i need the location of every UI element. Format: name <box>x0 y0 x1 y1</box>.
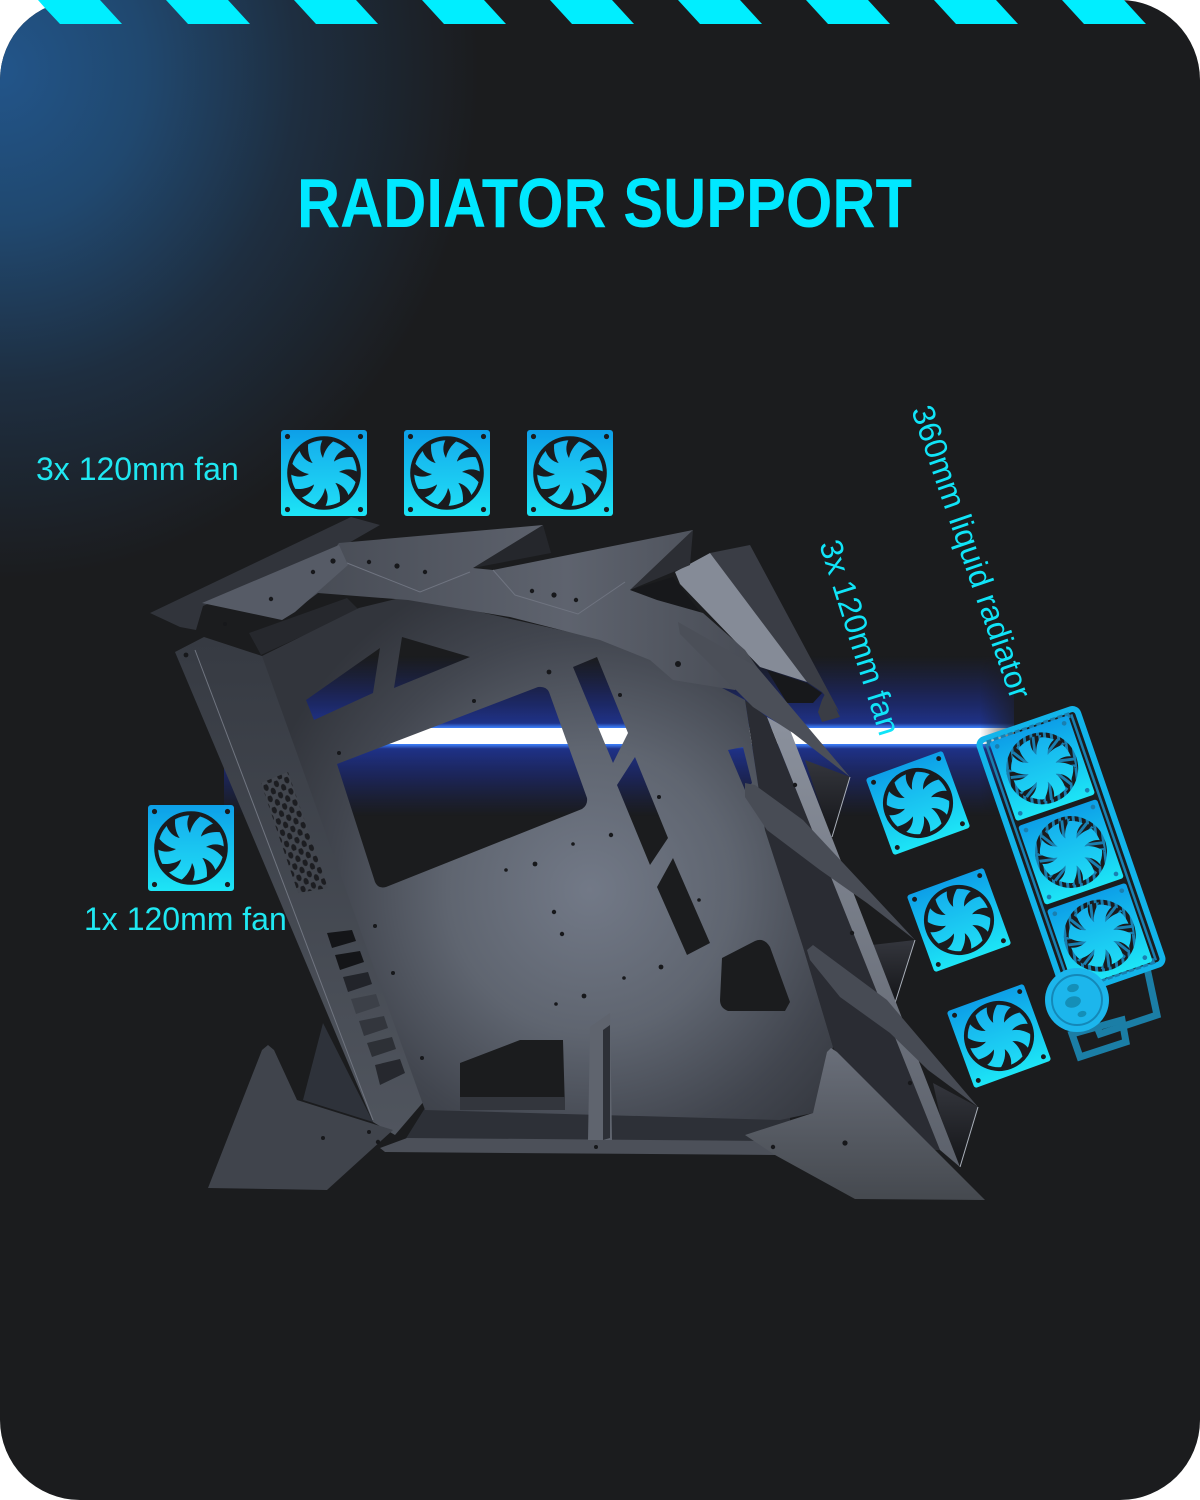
icon: rear fan <box>148 805 234 891</box>
label: 3x 120mm fan front: 3x 120mm fan <box>812 535 908 739</box>
right rear structure <box>745 700 940 1150</box>
computer case frame <box>150 517 985 1200</box>
icon: pump head <box>1045 968 1109 1032</box>
right foot <box>745 1048 985 1200</box>
left foot <box>208 1045 393 1190</box>
icon: front fan 1 <box>866 751 970 855</box>
top right connector <box>818 690 840 722</box>
wing dark tips <box>150 517 700 630</box>
label: 3x 120mm fan top: 3x 120mm fan <box>36 451 239 487</box>
wing light plate <box>202 545 348 620</box>
light bar behind case <box>224 656 1014 816</box>
icon: 360mm radiator <box>978 707 1164 997</box>
roof band <box>282 525 757 690</box>
icon: front fan 3 <box>947 984 1051 1088</box>
top right fin dark side <box>710 545 840 713</box>
top-left blue glow <box>0 0 520 620</box>
expansion slots <box>327 930 405 1085</box>
middle diagonal plate <box>745 783 915 940</box>
fan housing under wing <box>249 598 359 655</box>
label: 1x 120mm fan: 1x 120mm fan <box>84 901 287 937</box>
icon: top fan 1 <box>281 430 367 516</box>
psu cutout rail <box>460 1097 565 1110</box>
floor <box>405 1108 790 1141</box>
icon: top fan 2 <box>404 430 490 516</box>
label: 360mm liquid radiator: 360mm liquid radiator <box>904 401 1039 704</box>
drive shroud <box>588 1013 612 1140</box>
top right diagonal plate <box>678 622 850 777</box>
striped top band <box>38 0 1146 24</box>
icon: pump mounting brackets <box>1072 968 1157 1057</box>
screw holes <box>184 558 912 1149</box>
roof mounting plate outlines <box>347 563 625 614</box>
base rail <box>380 1138 780 1155</box>
rear triangle behind left foot <box>303 1023 373 1122</box>
right side boxes <box>805 760 978 1167</box>
side panel edge <box>195 650 373 1120</box>
right light strip <box>767 717 960 1167</box>
motherboard plate with cutouts <box>262 596 833 1120</box>
icon: front fan 2 <box>907 868 1011 972</box>
top right fin light plate <box>675 553 807 682</box>
title: RADIATOR SUPPORT <box>297 164 912 242</box>
side panel <box>175 637 425 1135</box>
lower diagonal plate <box>807 945 978 1107</box>
vent grille <box>261 772 328 893</box>
icon: top fan 3 <box>527 430 613 516</box>
top right inner block <box>767 670 822 703</box>
